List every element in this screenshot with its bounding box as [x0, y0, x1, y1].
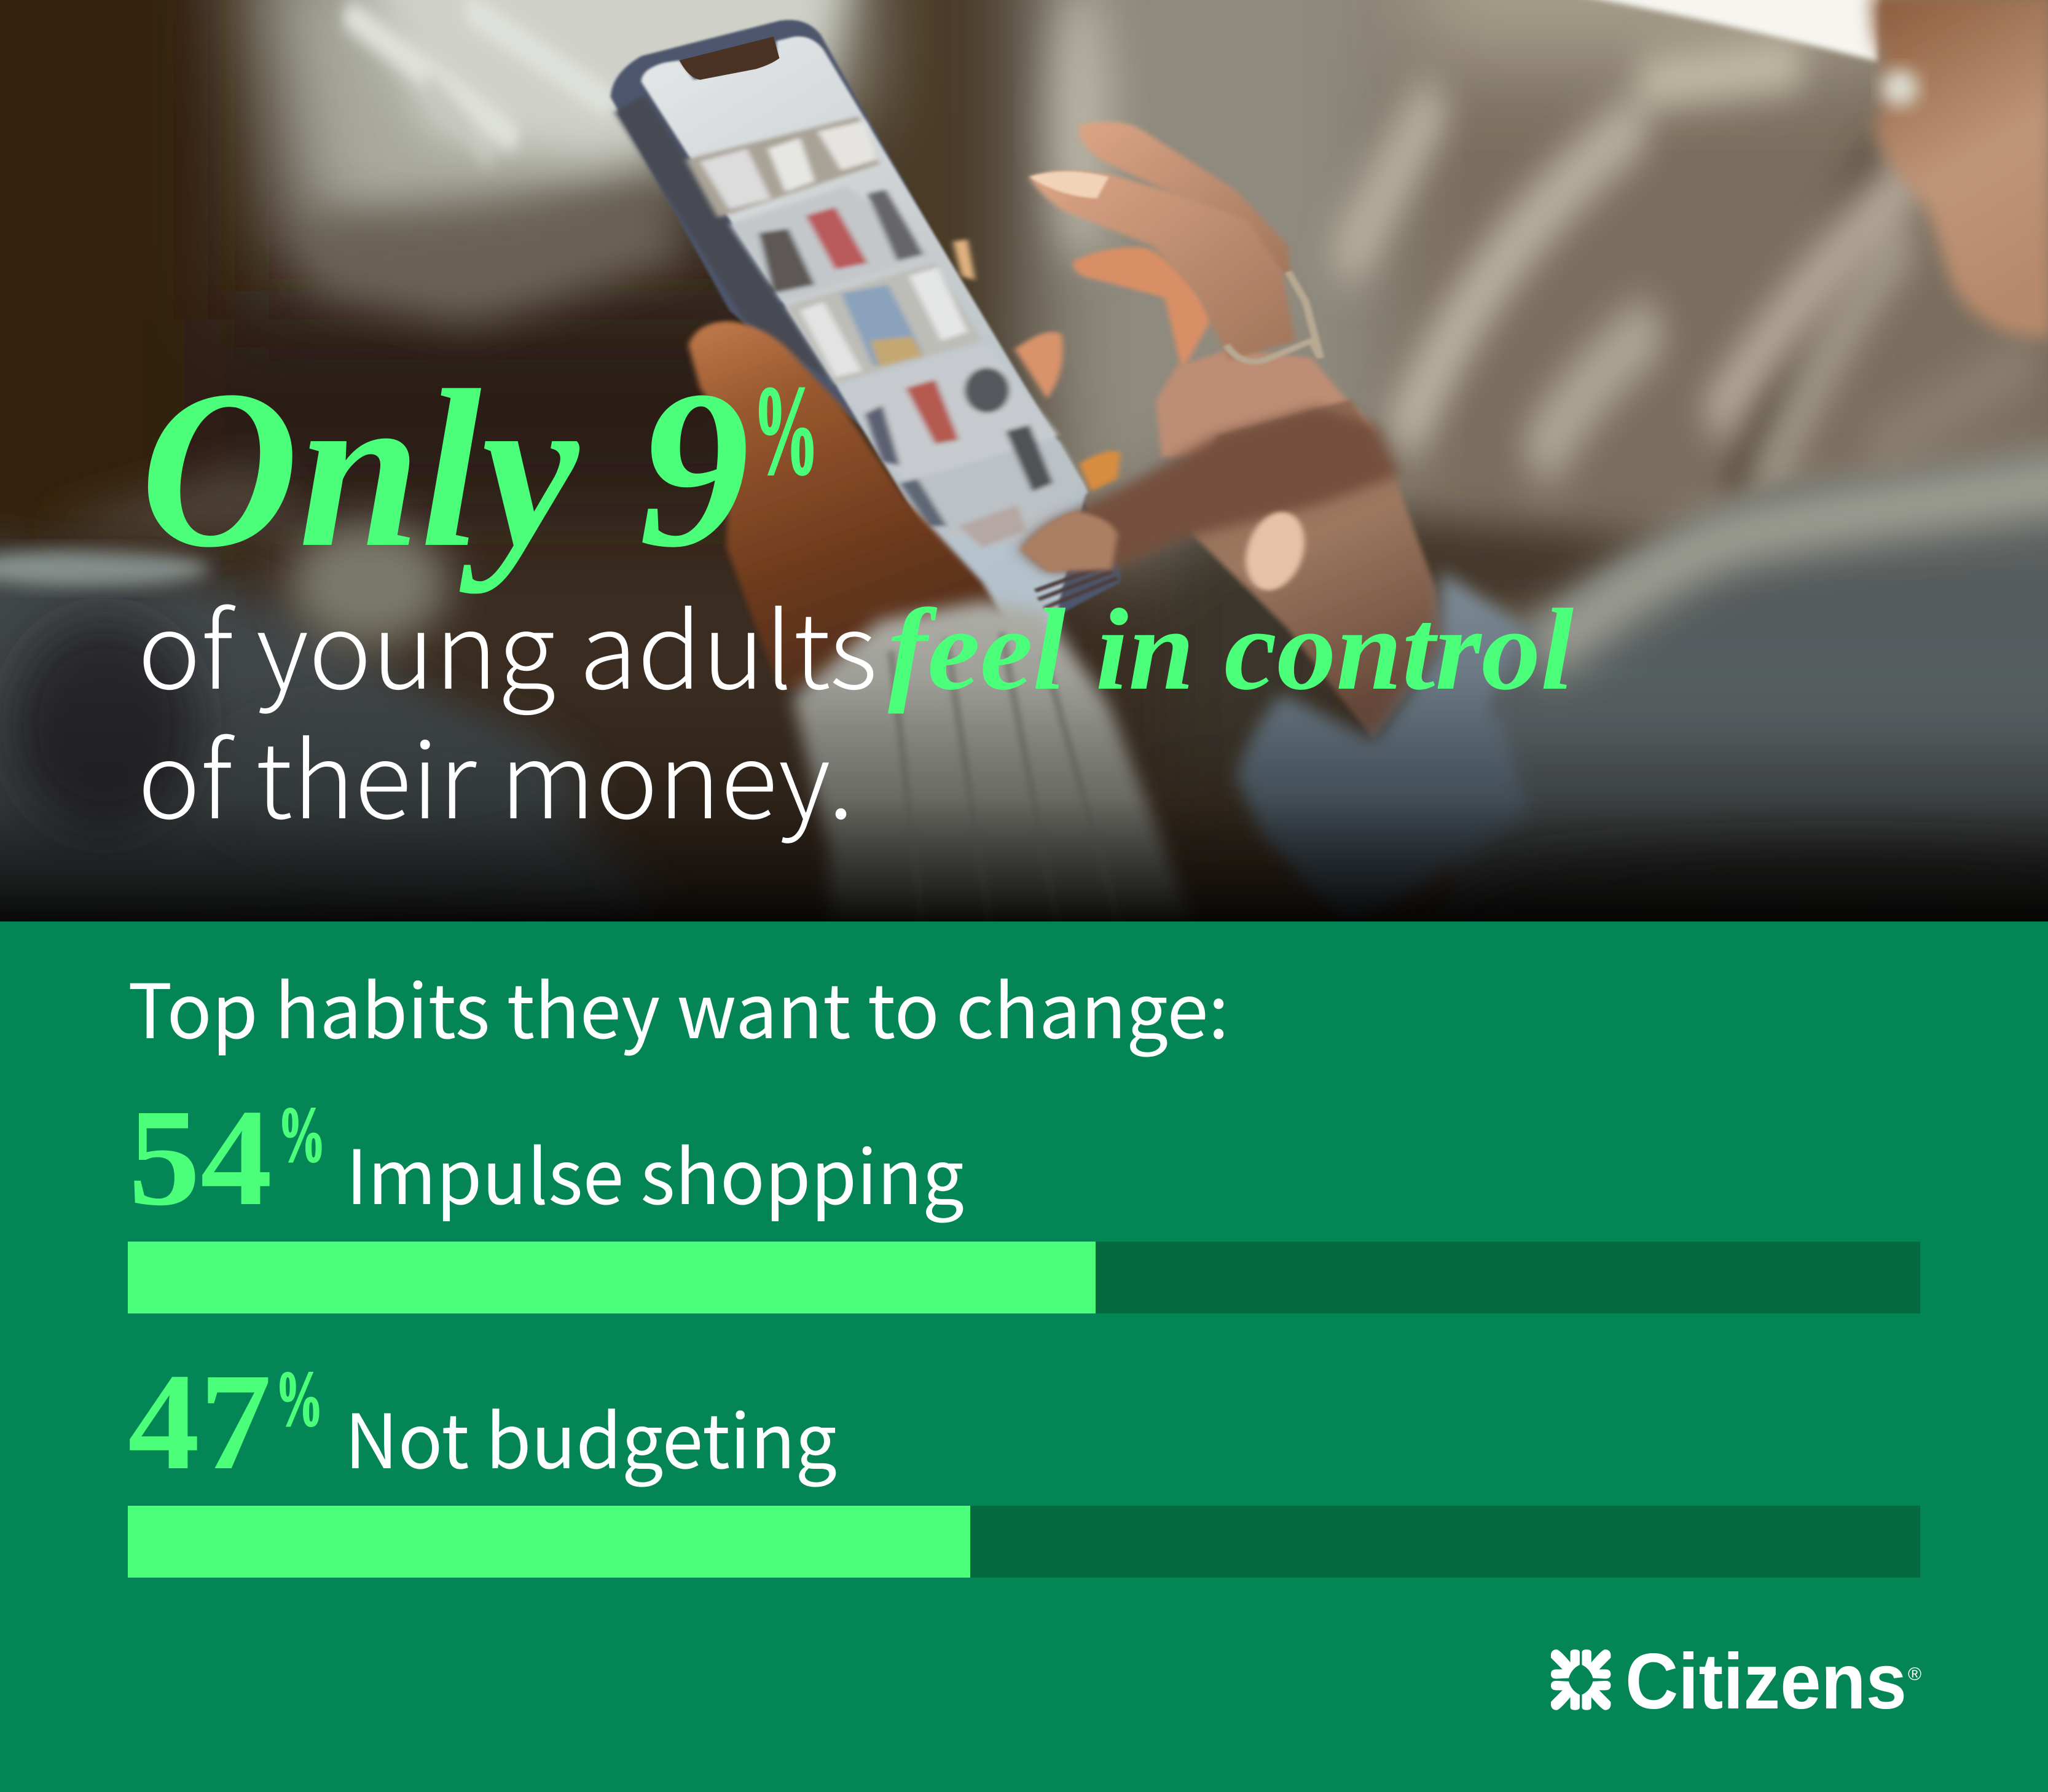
right hand index finger [1029, 171, 1295, 360]
soft beige highlights left [43, 461, 449, 645]
bright window strip [1573, 0, 1880, 61]
stat: 54% impulse shopping: % [278, 1091, 326, 1178]
subhead line one: of young adults [138, 568, 877, 719]
pointing thumb [1021, 407, 1400, 571]
logo wordmark: Citizens [1625, 1638, 1907, 1726]
logo: Citizens [1551, 1638, 1921, 1726]
phone body [611, 20, 1121, 621]
fingers behind phone [953, 240, 1121, 491]
phone side shadow [614, 95, 830, 380]
right sleeve cuff [1236, 571, 1529, 928]
stat: 47% not budgeting [128, 1345, 837, 1498]
registered mark: ® [1908, 1664, 1921, 1684]
subhead line two: of their money. [138, 697, 854, 848]
subhead line one: feel in control [888, 585, 1574, 714]
big nail [1238, 509, 1312, 594]
right sofa folds [1352, 65, 2018, 588]
icon: Citizens mark [1551, 1649, 1611, 1710]
product grid [685, 117, 1085, 548]
stat: 47% not budgeting: % [275, 1355, 323, 1442]
right hand top finger [1079, 122, 1291, 280]
headline: only 9%: 9 [639, 343, 750, 594]
thumb tip [1021, 511, 1118, 571]
photo: hands holding a phone on a sofa [0, 0, 2048, 958]
sofa background [0, 0, 2048, 799]
panel heading: Top habits they want to change: [128, 952, 1229, 1060]
headline: only 9% [140, 343, 819, 595]
dark gradient over bottom of photo [0, 676, 2048, 921]
bar: 54% [128, 1242, 1920, 1313]
left hand [688, 321, 1047, 690]
stat: 54% impulse shopping [128, 1081, 964, 1234]
ring [1226, 272, 1320, 362]
stat: 47% not budgeting: 47 [128, 1345, 272, 1498]
nose highlight [1881, 69, 1918, 106]
knitted sweater right [1444, 445, 2048, 958]
sweater fold [1376, 848, 2048, 958]
subhead line one [138, 568, 1574, 719]
left cushion streaks [353, 12, 604, 153]
back of right hand upper [1156, 350, 1376, 457]
right hand middle finger [1073, 247, 1212, 371]
panel: habits [0, 921, 2048, 1792]
left sleeve ribbing [793, 601, 1195, 928]
sleeve left [0, 541, 676, 958]
phone screen bottom stripes [1035, 565, 1118, 608]
nail on index finger [1029, 171, 1108, 198]
phone screen [641, 36, 1088, 676]
phone notch [680, 37, 779, 80]
stat: 54% impulse shopping: 54 [128, 1081, 272, 1234]
centre sofa highlight [1051, 0, 1112, 264]
headline: only 9%: Only [140, 343, 581, 595]
stat: 54% impulse shopping: Impulse shopping [346, 1117, 964, 1226]
back of right hand [1190, 399, 1441, 740]
bar: 47% [128, 1506, 1920, 1578]
face at right edge [1871, 0, 2048, 338]
headline: only 9%: % [753, 360, 819, 501]
stat: 47% not budgeting: Not budgeting [345, 1382, 837, 1490]
